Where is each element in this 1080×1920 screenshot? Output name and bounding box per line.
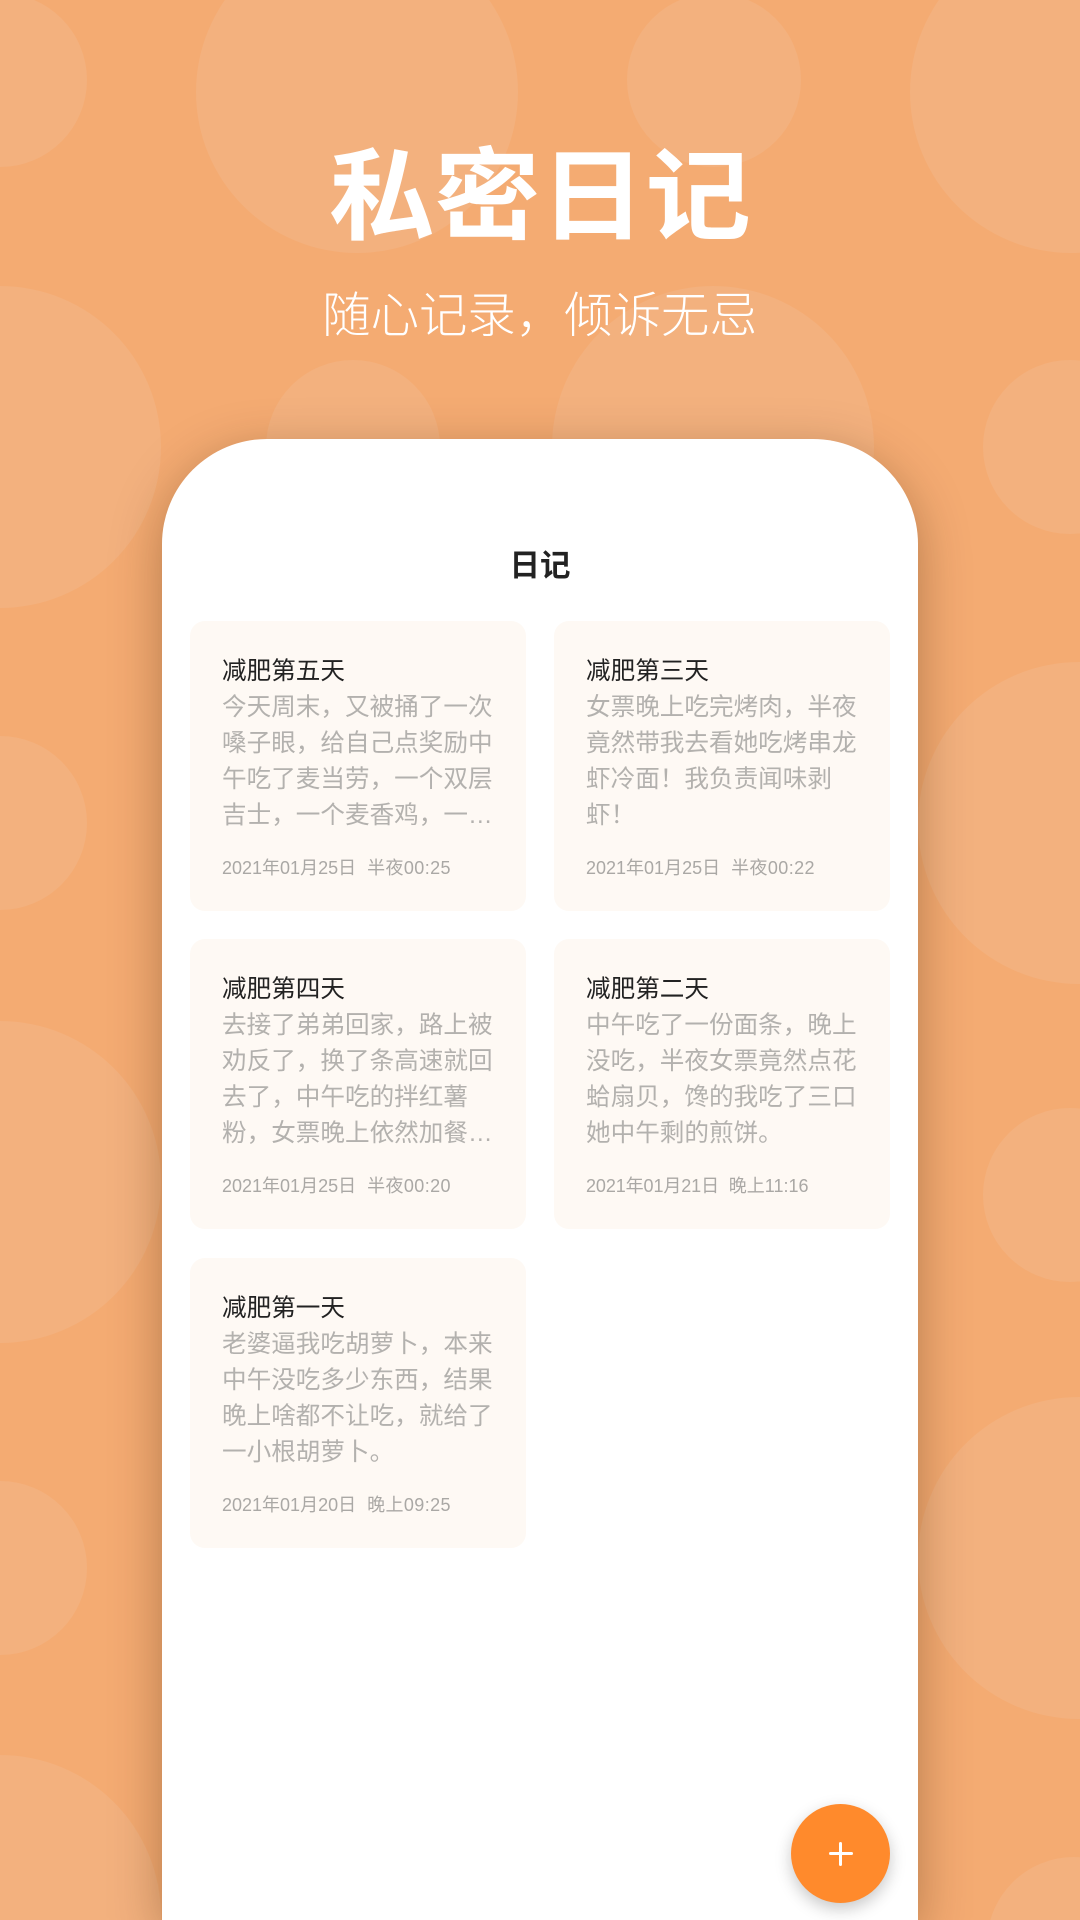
diary card: day three bbox=[554, 621, 890, 911]
diary card: day five bbox=[190, 621, 526, 911]
diary card: day three: 虾！ bbox=[586, 802, 635, 829]
icon: add button bbox=[791, 1804, 890, 1903]
title: 私密日记 bbox=[329, 141, 751, 254]
diary card: day one: 减肥第一天 bbox=[222, 1295, 345, 1322]
diary card: day two: 蛤扇贝，馋的我吃了三口 bbox=[586, 1084, 857, 1111]
diary card: day five: 2021年01月25日 半夜00:25 bbox=[222, 858, 451, 878]
diary card: day one: 一小根胡萝卜。 bbox=[222, 1439, 394, 1466]
diary card: day four: 粉，女票晚上依然加餐… bbox=[222, 1120, 493, 1147]
diary card: day three: 2021年01月25日 半夜00:22 bbox=[586, 858, 815, 878]
diary card: day four: 减肥第四天 bbox=[222, 976, 345, 1003]
diary card: day five: 今天周末，又被捅了一次 bbox=[222, 694, 493, 721]
diary card: day three: 减肥第三天 bbox=[586, 658, 709, 685]
diary card: day two: 2021年01月21日 晚上11:16 bbox=[586, 1176, 809, 1196]
diary card: day four: 劝反了，换了条高速就回 bbox=[222, 1048, 493, 1075]
diary card: day four: 去了，中午吃的拌红薯 bbox=[222, 1084, 468, 1111]
diary card: day one: 老婆逼我吃胡萝卜，本来 bbox=[222, 1331, 493, 1358]
diary card: day four bbox=[190, 939, 526, 1229]
diary card: day one bbox=[190, 1258, 526, 1548]
panel: phone screen bbox=[162, 439, 918, 1920]
diary card: day two: 减肥第二天 bbox=[586, 976, 709, 1003]
diary card: day five: 嗓子眼，给自己点奖励中 bbox=[222, 730, 493, 757]
diary card: day five: 吉士，一个麦香鸡，一… bbox=[222, 802, 493, 829]
diary card: day four: 2021年01月25日 半夜00:20 bbox=[222, 1176, 451, 1196]
screen heading: 日记 bbox=[510, 549, 570, 583]
diary card: day one: 中午没吃多少东西，结果 bbox=[222, 1367, 493, 1394]
diary card: day two: 中午吃了一份面条，晚上 bbox=[586, 1012, 857, 1039]
diary card: day three: 虾冷面！我负责闻味剥 bbox=[586, 766, 832, 793]
diary card: day four: 去接了弟弟回家，路上被 bbox=[222, 1012, 493, 1039]
diary card: day three: 竟然带我去看她吃烤串龙 bbox=[586, 730, 857, 757]
diary card: day two: 她中午剩的煎饼。 bbox=[586, 1120, 783, 1147]
diary card: day three: 女票晚上吃完烤肉，半夜 bbox=[586, 694, 857, 721]
diary card: day five: 午吃了麦当劳，一个双层 bbox=[222, 766, 493, 793]
subtitle: 随心记录，倾诉无忌 bbox=[322, 289, 758, 343]
diary card: day two bbox=[554, 939, 890, 1229]
diary card: day five: 减肥第五天 bbox=[222, 658, 345, 685]
diary card: day one: 2021年01月20日 晚上09:25 bbox=[222, 1495, 451, 1515]
diary card: day one: 晚上啥都不让吃，就给了 bbox=[222, 1403, 493, 1430]
diary card: day two: 没吃，半夜女票竟然点花 bbox=[586, 1048, 857, 1075]
